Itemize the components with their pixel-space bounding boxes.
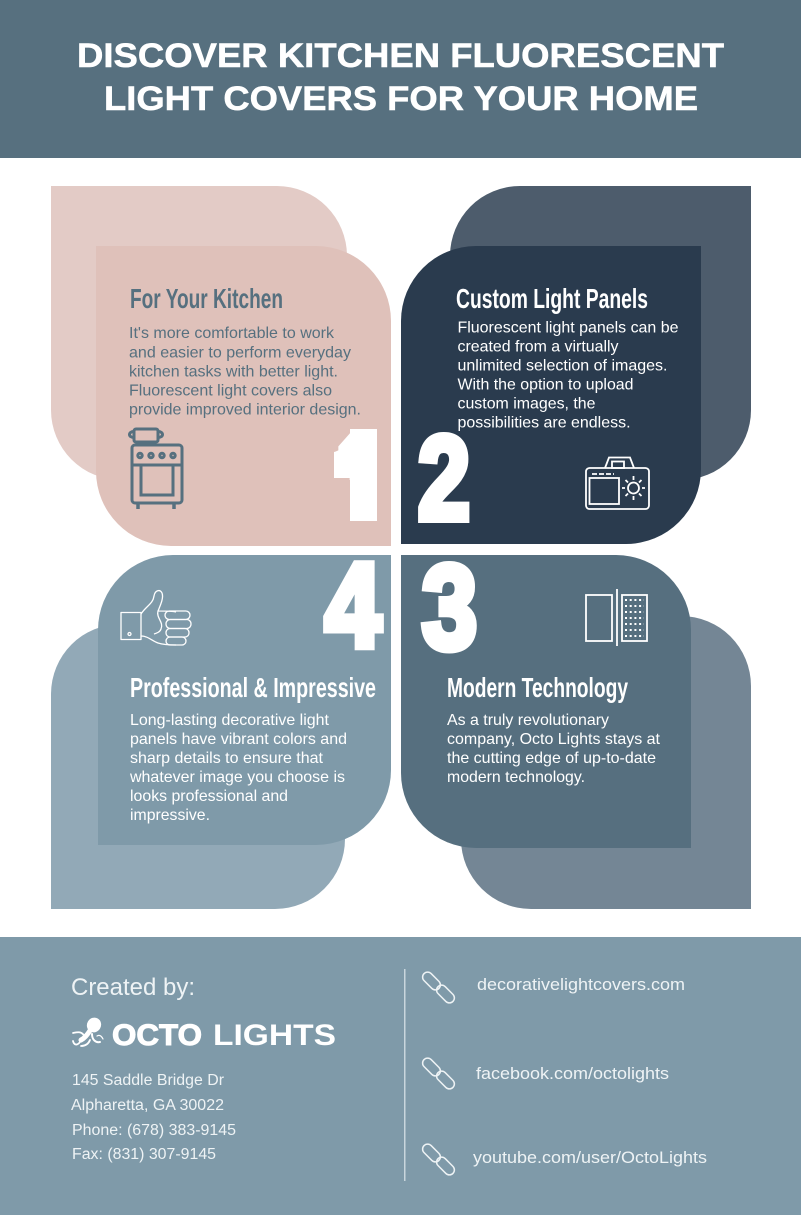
text block: modern technology: As a truly revolutionary [447,712,609,729]
icon: chain link [421,970,456,1005]
link 2: facebook: facebook.com/octolights [476,1064,669,1083]
footer band [0,937,801,1215]
logo: octo lights [73,1015,336,1052]
panel 1: for your kitchen [51,186,391,546]
link 2: facebook [421,1056,669,1091]
text block: custom panels: possibilities are endless. [458,414,630,432]
number 2: 2 [418,412,470,545]
heading: custom light panels: Custom Light Panels [456,283,648,314]
icon: chain link [421,1056,456,1091]
text block: professional: Long-lasting decorative light [130,712,330,729]
text block: kitchen: It's more comfortable to work [129,325,335,342]
text block: custom panels: With the option to upload [458,376,634,394]
address block: Phone: (678) 383-9145 [72,1122,236,1139]
text block: custom panels [458,320,679,432]
text block: kitchen [129,325,361,418]
logo: octo lights: OCTO [112,1019,202,1052]
link 1: website [421,970,685,1005]
text block: professional [129,712,347,824]
heading: modern technology: Modern Technology [447,672,628,703]
header band [0,0,801,158]
text block: custom panels: Fluorescent light panels can be [458,320,679,336]
text block: professional: looks professional and [130,788,288,805]
panel 3: modern technology [401,541,751,909]
title: LIGHT COVERS FOR YOUR HOME [104,80,698,118]
icon: chain link [421,1142,456,1177]
icon: camera [586,458,649,509]
text block: kitchen: provide improved interior design. [129,402,361,418]
title [77,37,724,118]
heading: professional and impressive: Professional & Impressive [130,672,376,703]
number 3: 3 [422,541,477,674]
text block: modern technology: the cutting edge of up-to-date [447,750,656,767]
heading: for your kitchen: For Your Kitchen [130,283,283,314]
text block: modern technology: company, Octo Lights stays at [447,731,661,748]
text block: kitchen: kitchen tasks with better light. [129,364,338,380]
text block: custom panels: custom images, the [458,396,596,412]
logo: octo lights: LIGHTS [213,1019,336,1052]
text block: professional: impressive. [130,807,210,824]
icon: octopus [73,1015,104,1046]
text block: custom panels: created from a virtually [458,338,618,356]
icon: light panel [586,589,647,646]
link 1: website: decorativelightcovers.com [477,975,685,994]
link 3: youtube [421,1142,707,1177]
icon: thumbs up [121,591,191,645]
icon: stove [130,429,182,509]
number 4: 4 [325,539,381,672]
panel 4: professional and impressive [51,539,391,909]
created by label: Created by: [71,974,195,1001]
text block: professional: sharp details to ensure that [130,750,324,767]
address block: 145 Saddle Bridge Dr [72,1072,224,1089]
number 1 [334,429,377,521]
address block [71,1072,236,1163]
panel 2: custom light panels [401,186,751,545]
text block: modern technology: modern technology. [447,769,585,786]
title: DISCOVER KITCHEN FLUORESCENT [77,37,724,75]
address block: Fax: (831) 307-9145 [72,1146,216,1163]
text block: kitchen: Fluorescent light covers also [129,382,332,400]
number 1: 1 [336,410,374,543]
address block: Alpharetta, GA 30022 [71,1097,224,1114]
link 3: youtube: youtube.com/user/OctoLights [473,1148,707,1167]
text block: professional: whatever image you choose is [129,769,345,786]
text block: modern technology [447,712,661,786]
text block: professional: panels have vibrant colors and [130,731,347,748]
text block: custom panels: unlimited selection of images. [458,358,668,374]
text block: kitchen: and easier to perform everyday [129,344,351,362]
